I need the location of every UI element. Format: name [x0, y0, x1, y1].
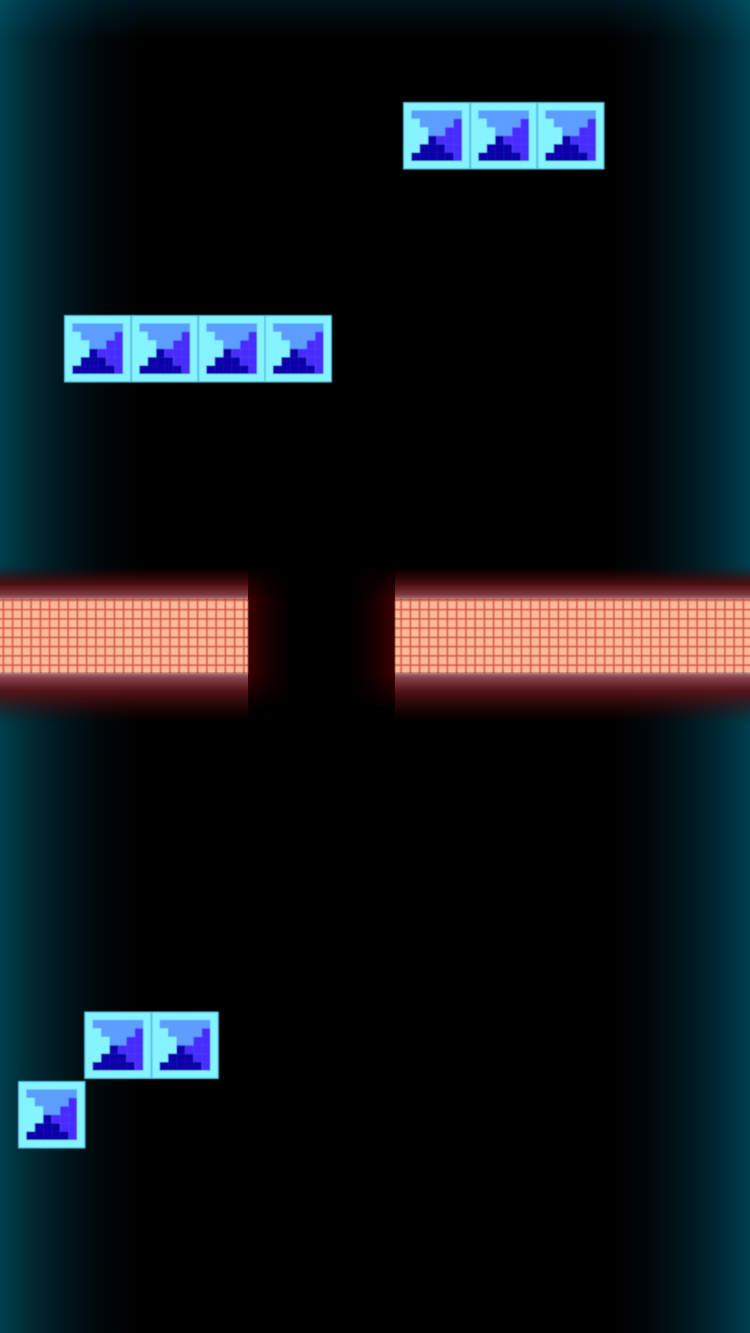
- blue block: bottom left single tile: [18, 1081, 85, 1148]
- red barrier: left: [0, 566, 248, 723]
- blue block row: top, three tiles: [403, 102, 604, 169]
- red glow in gap: [248, 565, 395, 710]
- blue block row: middle, four tiles: [64, 315, 332, 382]
- blue block row: bottom, two tiles: [84, 1012, 219, 1079]
- red barrier: right: [395, 566, 750, 723]
